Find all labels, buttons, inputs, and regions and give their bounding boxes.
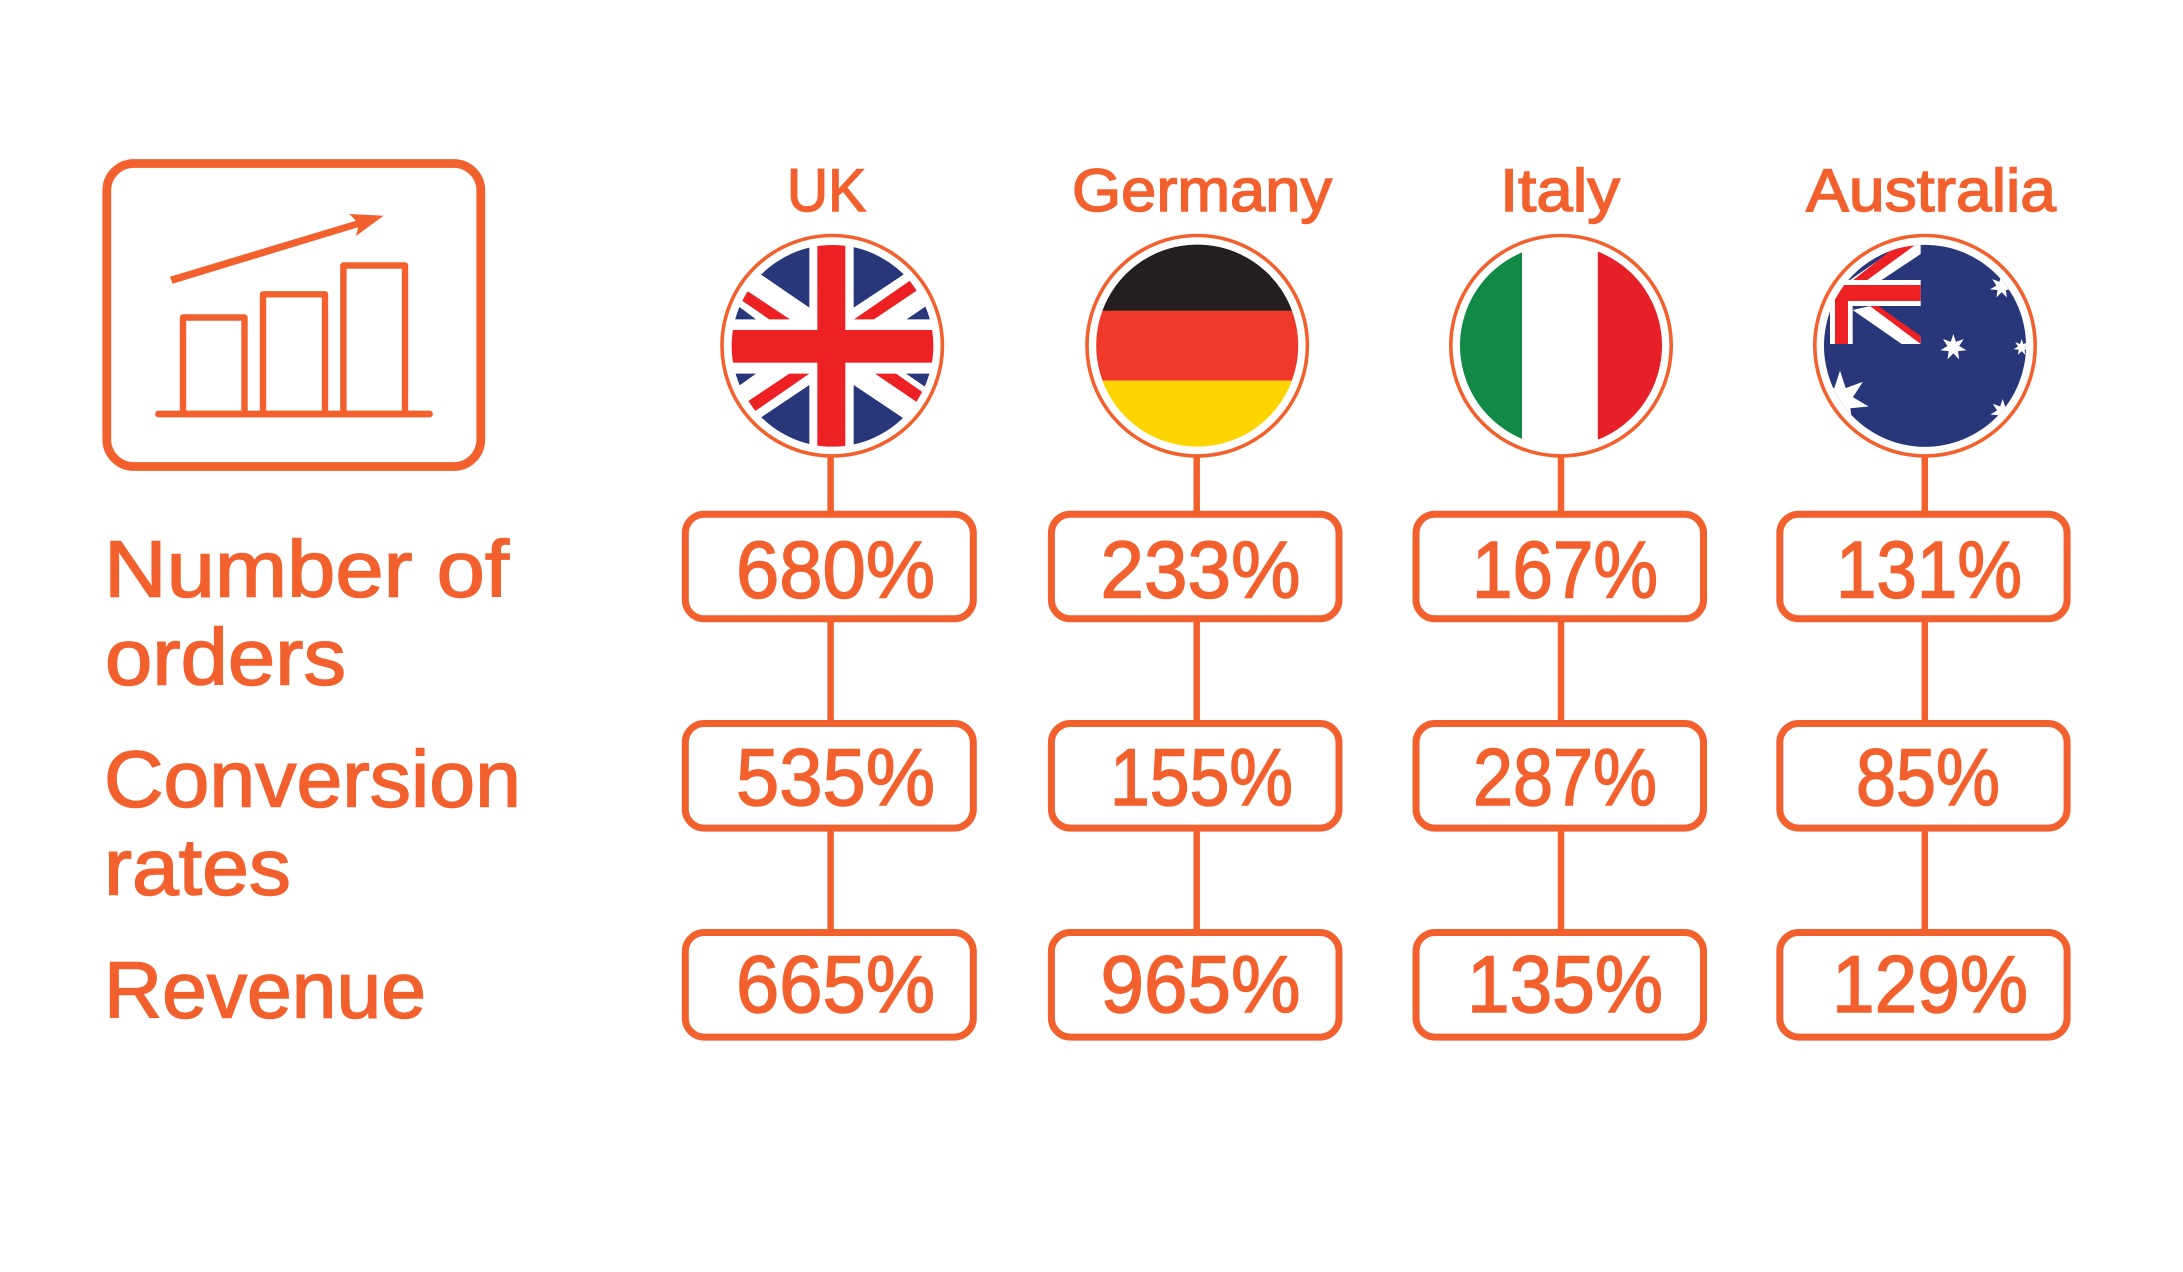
column: Germany (1051, 157, 1339, 1037)
icon: Australian flag (1810, 230, 2040, 460)
Germany revenue: 965% (1100, 940, 1300, 1030)
Italy conversion rates (1416, 724, 1704, 828)
Australia conversion rates: 85% (1856, 733, 2000, 823)
Italy revenue (1416, 932, 1704, 1037)
icon: German flag (1087, 236, 1310, 456)
Australia conversion rates (1780, 724, 2067, 828)
row label: Number of orders: orders (105, 612, 346, 702)
Germany number of orders (1051, 514, 1339, 619)
UK number of orders: 680% (736, 525, 935, 615)
Germany conversion rates: 155% (1110, 733, 1293, 823)
icon: UK flag (720, 230, 950, 460)
UK number of orders (685, 514, 973, 619)
row label: Revenue: Revenue (104, 946, 426, 1035)
connector lines (831, 455, 1925, 1000)
Australia revenue: 129% (1832, 940, 2028, 1030)
UK revenue: 665% (736, 940, 935, 1030)
heading: Italy: Italy (1500, 157, 1620, 224)
Italy number of orders (1416, 514, 1704, 619)
heading: Germany: Germany (1072, 157, 1332, 224)
row label: Conversion rates: Conversion (104, 735, 521, 824)
icon: growth bar chart with arrow (107, 164, 481, 466)
Germany number of orders: 233% (1100, 525, 1300, 615)
column: Australia (1780, 157, 2067, 1037)
row label: Number of orders: Number of (104, 525, 510, 614)
heading: Australia: Australia (1806, 157, 2057, 224)
Italy revenue: 135% (1467, 940, 1663, 1030)
Australia number of orders (1780, 514, 2067, 619)
Germany conversion rates (1051, 724, 1339, 828)
UK revenue (685, 932, 973, 1037)
column: Italy (1416, 157, 1704, 1037)
Italy conversion rates: 287% (1473, 733, 1657, 823)
icon: Italian flag (1451, 236, 1671, 456)
Australia number of orders: 131% (1836, 525, 2022, 615)
row label: Number of orders (104, 525, 510, 702)
column: UK (685, 157, 973, 1037)
Australia revenue (1780, 932, 2067, 1037)
heading: UK: UK (787, 157, 866, 224)
UK conversion rates: 535% (736, 733, 935, 823)
row label: Conversion rates: rates (104, 823, 291, 912)
Germany revenue (1051, 932, 1339, 1037)
row label: Conversion rates (104, 735, 521, 912)
UK conversion rates (685, 724, 973, 828)
Italy number of orders: 167% (1472, 525, 1658, 615)
